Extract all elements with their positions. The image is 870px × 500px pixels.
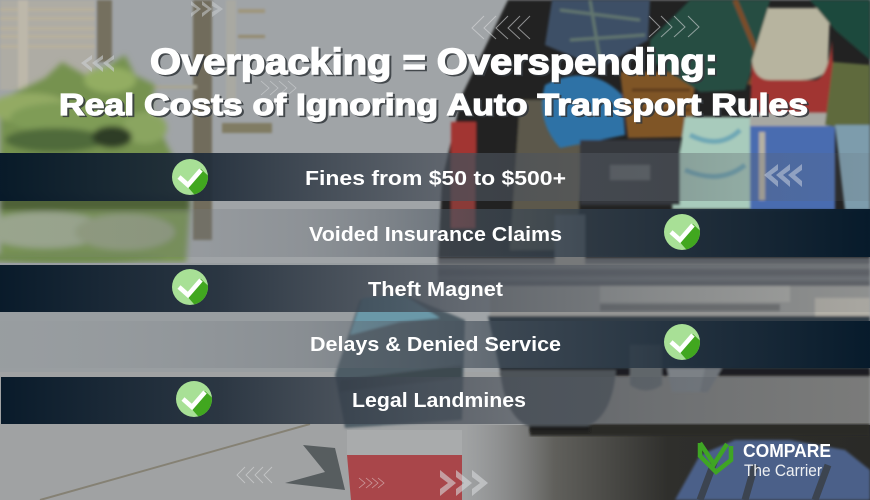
icon: check row 1	[172, 159, 222, 209]
decorative chevron: upper left	[81, 55, 114, 72]
background: green bush	[0, 55, 190, 264]
decorative chevron: right over cooler	[764, 164, 802, 187]
decorative chevron: outline top left of vehicle	[472, 16, 530, 39]
row bar 3	[0, 265, 870, 312]
icon: check row 2	[664, 214, 714, 264]
background: blue duffel bag	[675, 440, 870, 500]
icon: logo mark	[700, 443, 731, 472]
row label: legal landmines: Legal Landmines	[352, 389, 526, 412]
decorative chevron: on cooler outline	[359, 478, 384, 488]
logo wordmark: compare: COMPARE	[743, 440, 831, 461]
decorative chevron: bottom center filled	[440, 470, 488, 496]
background: fins on driveway	[285, 445, 345, 490]
title: Overpacking = Overspending:	[150, 41, 718, 82]
row bar 4	[0, 321, 870, 368]
logo wordmark: the carrier: The Carrier	[744, 461, 822, 480]
row label: theft magnet: Theft Magnet	[368, 278, 503, 301]
title: Overpacking = Overspending:	[152, 42, 720, 84]
background: driveway	[0, 263, 440, 378]
row label: voided insurance claims: Voided Insurance Claims	[309, 223, 562, 246]
decorative chevron: outline top right of vehicle	[649, 16, 699, 37]
decorative chevron: top center	[191, 1, 223, 17]
row label: fines: Fines from $50 to $500+	[305, 167, 566, 190]
title: Real Costs of Ignoring Auto Transport Rules	[59, 87, 808, 122]
decorative chevron: outline under title	[261, 81, 296, 95]
background: red cooler	[347, 430, 462, 500]
background: house wall and posts	[0, 0, 272, 240]
row label: delays and denied service: Delays & Denied Service	[310, 333, 561, 356]
background: vehicle body	[438, 0, 870, 432]
background: packed cargo	[542, 0, 870, 210]
title	[59, 41, 810, 124]
row bar 1	[0, 153, 870, 201]
logo: Compare The Carrier	[700, 440, 831, 480]
decorative chevron: bottom left outline	[237, 467, 272, 483]
icon: check row 4	[664, 324, 714, 374]
title: Real Costs of Ignoring Auto Transport Rules	[61, 88, 810, 124]
row bar 2	[0, 209, 870, 257]
icon: check row 3	[172, 269, 222, 319]
background: teal backpack	[335, 294, 465, 428]
row bar 5	[1, 377, 870, 424]
icon: check row 5	[176, 381, 226, 431]
